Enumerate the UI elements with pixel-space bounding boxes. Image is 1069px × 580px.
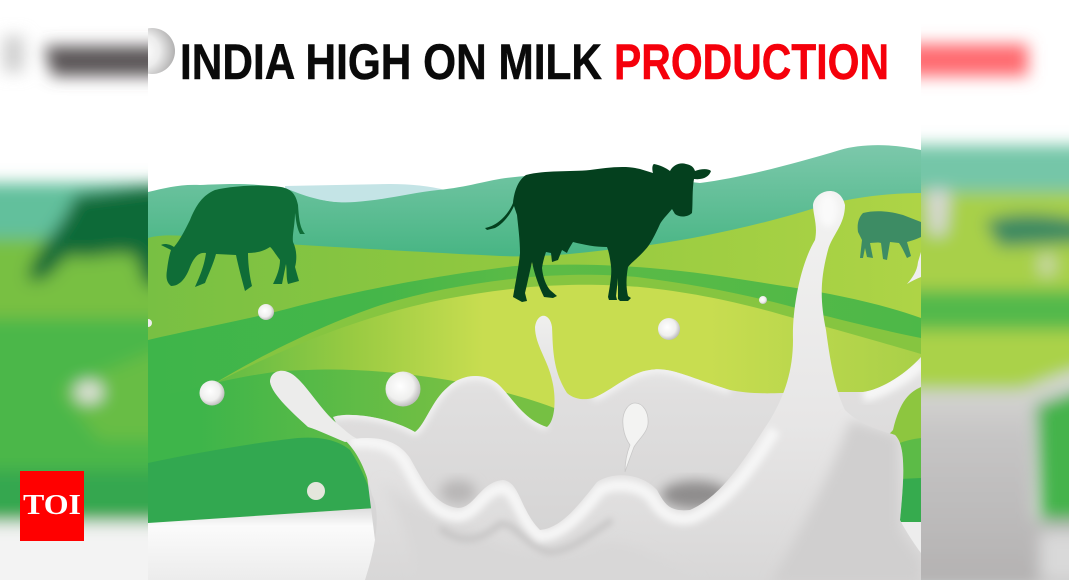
back hills xyxy=(148,145,921,256)
icon: distant cow xyxy=(858,211,921,260)
milk drop xyxy=(623,403,648,472)
milk droplets xyxy=(144,252,921,500)
panel: blurred left backdrop xyxy=(0,30,148,580)
shadow pit: left xyxy=(440,480,476,504)
icon: TOI logo: TOI xyxy=(23,490,81,521)
icon: white ball beside title xyxy=(148,28,175,74)
icon: TOI logo xyxy=(20,471,84,541)
right green patch xyxy=(890,387,921,443)
milk crown: back layer xyxy=(333,316,921,539)
milk arm: left xyxy=(270,371,360,442)
panel: central illustration xyxy=(148,145,921,580)
white milk floor xyxy=(148,508,374,580)
field: central yellow-green xyxy=(215,285,921,420)
panel: blurred right backdrop xyxy=(921,32,1069,580)
icon: grazing cow xyxy=(161,186,305,291)
field: lighter streak xyxy=(217,274,921,382)
field: lower green xyxy=(215,370,554,486)
milk crown: front wave and spike xyxy=(345,191,921,580)
icon: standing cow xyxy=(485,163,711,302)
sky patch xyxy=(285,184,445,204)
shadow pit: right xyxy=(661,481,729,509)
field: dark lower band xyxy=(148,438,376,523)
field: dark green band xyxy=(148,264,921,400)
field xyxy=(148,193,921,340)
title: PRODUCTION xyxy=(614,34,889,90)
title: INDIA HIGH ON MILK xyxy=(180,34,602,90)
